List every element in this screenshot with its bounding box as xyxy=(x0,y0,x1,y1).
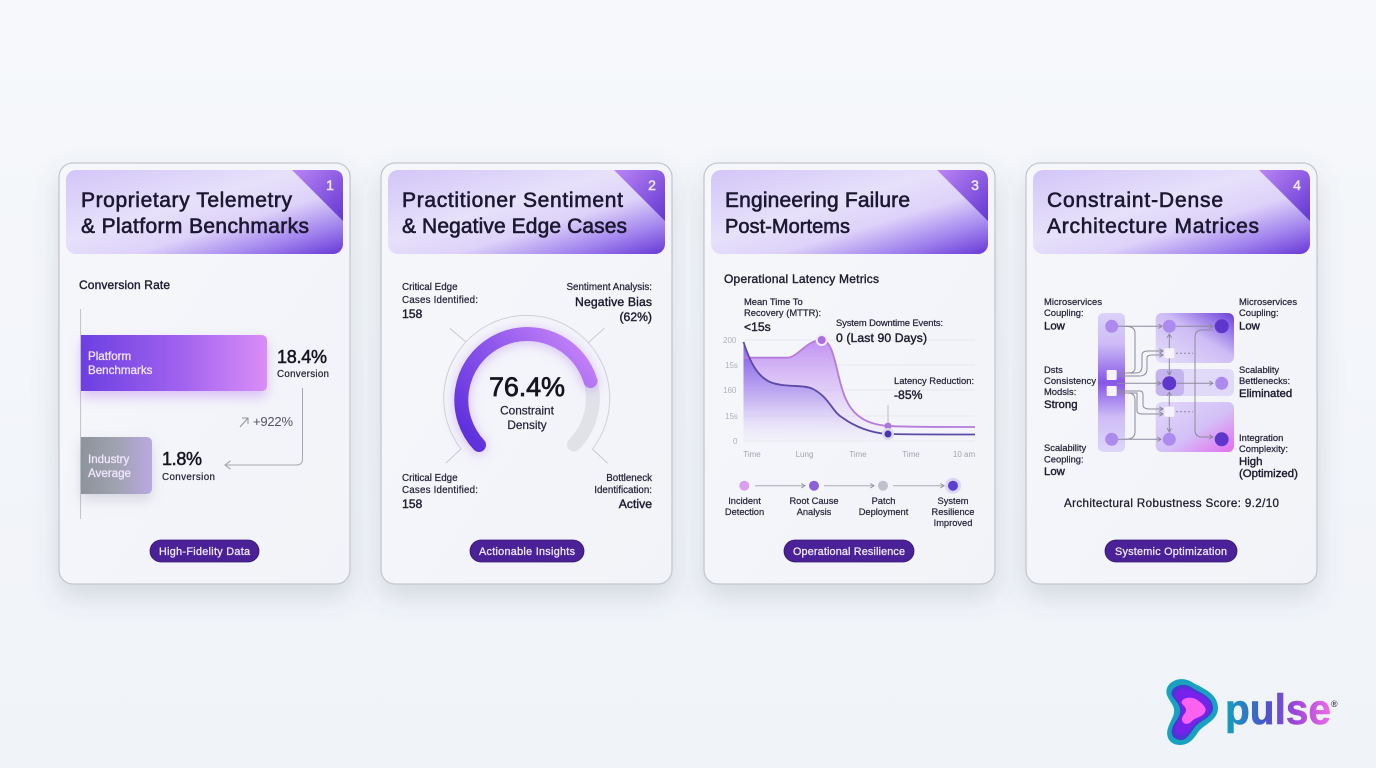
label: microservices right xyxy=(1239,296,1297,332)
value: 18.4% xyxy=(277,347,329,380)
gauge: constraint density: 76.4% xyxy=(489,372,565,402)
value: 1.8% xyxy=(162,449,215,483)
label: scalability left: Scalability xyxy=(1044,442,1087,453)
label: sentiment analysis xyxy=(566,282,652,324)
tag pill xyxy=(1105,540,1237,562)
process flow: incident to resilience: Analysis xyxy=(797,507,832,517)
label: data consistency: Modsls: xyxy=(1044,386,1076,397)
label: edge cases bottom: Cases Identified: xyxy=(402,485,478,496)
line chart: latency: 160 xyxy=(723,386,737,395)
label: microservices left xyxy=(1044,296,1102,332)
panel: failure post-mortems xyxy=(704,163,995,584)
label: sentiment analysis: Sentiment Analysis: xyxy=(566,282,652,293)
tag pill: Systemic Optimization xyxy=(1115,546,1227,558)
label: bottlenecks: Eliminated xyxy=(1239,388,1292,400)
bar: platform benchmarks xyxy=(81,335,267,391)
panel: practitioner sentiment xyxy=(381,163,672,584)
label: data consistency: Dsts xyxy=(1044,364,1063,375)
line chart: latency: 15s xyxy=(725,412,738,421)
card 4 header: 4 xyxy=(1293,177,1301,193)
bar: platform benchmarks: Benchmarks xyxy=(88,364,153,377)
label: microservices right: Coupling: xyxy=(1239,307,1279,318)
callout: MTTR: Recovery (MTTR): xyxy=(744,307,821,318)
line chart: latency: 0 xyxy=(733,437,738,446)
label: edge cases top xyxy=(402,282,478,321)
callout: +922%: +922% xyxy=(253,414,293,429)
card 1 surface xyxy=(59,163,350,584)
line chart: latency: Lung xyxy=(796,450,813,459)
label: bottlenecks: Scalablity xyxy=(1239,364,1279,375)
process flow: incident to resilience: Detection xyxy=(725,507,764,517)
callout: MTTR: <15s xyxy=(744,320,771,334)
registered mark: ® xyxy=(1331,699,1338,709)
callout: downtime xyxy=(836,317,943,345)
label: edge cases top: Cases Identified: xyxy=(402,295,478,306)
robustness score: Architectural Robustness Score: 9.2/10 xyxy=(1064,497,1279,510)
gauge: constraint density: Constraint xyxy=(500,404,555,418)
label: sentiment analysis: (62%) xyxy=(619,310,652,324)
gauge: constraint density xyxy=(444,315,610,463)
line chart: latency: Time xyxy=(743,450,761,459)
label: edge cases top: Critical Edge xyxy=(402,282,458,293)
line chart: latency: Time xyxy=(849,450,867,459)
line chart: latency: 15s xyxy=(725,361,738,370)
card 2 header: Practitioner Sentiment xyxy=(402,189,623,212)
label: scalability left: Ceopling: xyxy=(1044,454,1084,464)
process flow: incident to resilience xyxy=(725,478,974,528)
logo: pulse xyxy=(1166,679,1338,745)
card 3 header: Post-Mortems xyxy=(725,216,850,238)
tag pill: Operational Resilience xyxy=(793,546,905,558)
card 4 header: Architecture Matrices xyxy=(1047,215,1259,238)
callout: downtime: System Downtime Events: xyxy=(836,317,943,328)
label: scalability left xyxy=(1044,442,1087,478)
callout: latency reduction: Latency Reduction: xyxy=(894,375,974,386)
label: microservices right: Microservices xyxy=(1239,296,1297,307)
panel: architecture matrices xyxy=(1026,163,1317,584)
process flow: incident to resilience: Incident xyxy=(728,496,761,506)
callout: MTTR xyxy=(744,296,821,334)
label: integration complexity: Integration xyxy=(1239,432,1283,443)
bar: industry average: Average xyxy=(88,467,131,480)
label: microservices left: Low xyxy=(1044,320,1066,332)
tag pill xyxy=(470,540,584,562)
card 2 header xyxy=(388,170,665,254)
label: bottleneck: Identification: xyxy=(594,485,652,496)
process flow: incident to resilience: System xyxy=(938,496,969,506)
card 2 header: 2 xyxy=(648,177,656,193)
bar chart: conversion xyxy=(80,309,329,519)
label: data consistency xyxy=(1044,364,1096,411)
value: 1.8%: 1.8% xyxy=(162,449,202,469)
process flow: incident to resilience: Deployment xyxy=(859,507,909,517)
label: bottlenecks xyxy=(1239,364,1292,400)
label: data consistency: Strong xyxy=(1044,399,1078,411)
card 4 header xyxy=(1033,170,1310,254)
card 1 header: 1 xyxy=(326,177,334,193)
callout: MTTR: Mean Time To xyxy=(744,296,803,307)
card 3 surface xyxy=(704,163,995,584)
architecture diagram xyxy=(1098,313,1234,452)
label: bottleneck xyxy=(594,473,652,511)
label: integration complexity xyxy=(1239,432,1298,480)
chart title: Operational Latency Metrics xyxy=(724,272,879,286)
value: 18.4%: Conversion xyxy=(277,369,329,380)
tag pill: High-Fidelity Data xyxy=(159,546,250,558)
label: edge cases top: 158 xyxy=(402,307,423,321)
chart title: Conversion Rate xyxy=(79,278,170,292)
icon: pulse blob xyxy=(1166,679,1218,745)
line chart: latency xyxy=(723,335,975,459)
process flow: incident to resilience: Improved xyxy=(934,518,972,528)
tag pill xyxy=(784,540,914,562)
bar: industry average: Industry xyxy=(88,453,129,466)
card 1 header: & Platform Benchmarks xyxy=(81,215,309,238)
gauge: constraint density: Density xyxy=(507,418,547,432)
arrow: comparison xyxy=(225,388,302,465)
bar: platform benchmarks: Platform xyxy=(88,350,131,363)
card 1 header xyxy=(66,170,343,254)
label: edge cases bottom: Critical Edge xyxy=(402,473,458,484)
label: microservices left: Microservices xyxy=(1044,296,1102,307)
line chart: latency: 10 am xyxy=(953,450,975,459)
card 1 header: Proprietary Telemetry xyxy=(81,189,292,212)
label: edge cases bottom: 158 xyxy=(402,497,423,511)
process flow: incident to resilience: Resilience xyxy=(932,507,974,517)
value: 18.4%: 18.4% xyxy=(277,347,327,367)
label: bottlenecks: Bettlenecks: xyxy=(1239,375,1290,386)
callout: downtime: 0 (Last 90 Days) xyxy=(836,331,927,345)
tag pill xyxy=(150,540,259,562)
callout: latency reduction: -85% xyxy=(894,388,923,402)
label: integration complexity: High xyxy=(1239,456,1262,468)
tag pill: Actionable Insights xyxy=(479,546,576,558)
panel: proprietary telemetry xyxy=(59,163,350,584)
card 2 header: & Negative Edge Cases xyxy=(402,215,627,238)
label: edge cases bottom xyxy=(402,473,478,511)
card 4 header: Constraint-Dense xyxy=(1047,189,1223,212)
label: data consistency: Consistency xyxy=(1044,375,1096,386)
line chart: latency: 200 xyxy=(723,336,737,345)
wordmark: pulse xyxy=(1225,686,1331,734)
process flow: incident to resilience: Patch xyxy=(872,496,895,506)
label: integration complexity: Complexity: xyxy=(1239,443,1288,454)
card 3 header: Engineering Failure xyxy=(725,189,910,212)
process flow: incident to resilience: Root Cause xyxy=(789,496,839,506)
line chart: latency: Time xyxy=(902,450,920,459)
label: integration complexity: (Optimized) xyxy=(1239,468,1298,480)
card 4 surface xyxy=(1026,163,1317,584)
label: sentiment analysis: Negative Bias xyxy=(575,295,652,309)
callout: latency reduction xyxy=(894,375,974,402)
label: bottleneck: Bottleneck xyxy=(606,473,652,484)
label: microservices left: Coupling: xyxy=(1044,307,1084,318)
label: scalability left: Low xyxy=(1044,466,1066,478)
bar: industry average xyxy=(81,437,152,494)
card 3 header xyxy=(711,170,988,254)
card 3 header: 3 xyxy=(971,177,979,193)
card 2 surface xyxy=(381,163,672,584)
label: bottleneck: Active xyxy=(619,497,652,511)
value: 1.8%: Conversion xyxy=(162,472,215,483)
label: microservices right: Low xyxy=(1239,320,1261,332)
